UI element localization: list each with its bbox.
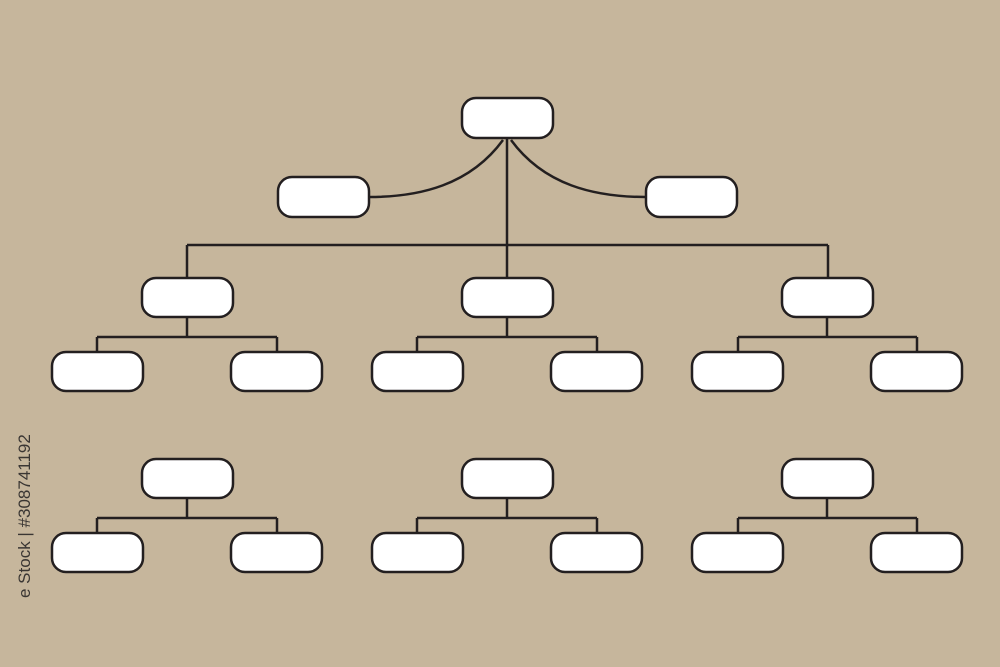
node: lower group children <box>52 533 962 572</box>
nodes <box>52 98 962 572</box>
node: level 3 <box>52 352 962 391</box>
node: side right <box>646 177 737 217</box>
connectors <box>97 138 917 533</box>
stock id text: e Stock | #308741192 <box>15 434 34 598</box>
node: top <box>462 98 553 138</box>
node: level 2 <box>142 278 873 317</box>
node: lower group parents <box>142 459 873 498</box>
node: side left <box>278 177 369 217</box>
